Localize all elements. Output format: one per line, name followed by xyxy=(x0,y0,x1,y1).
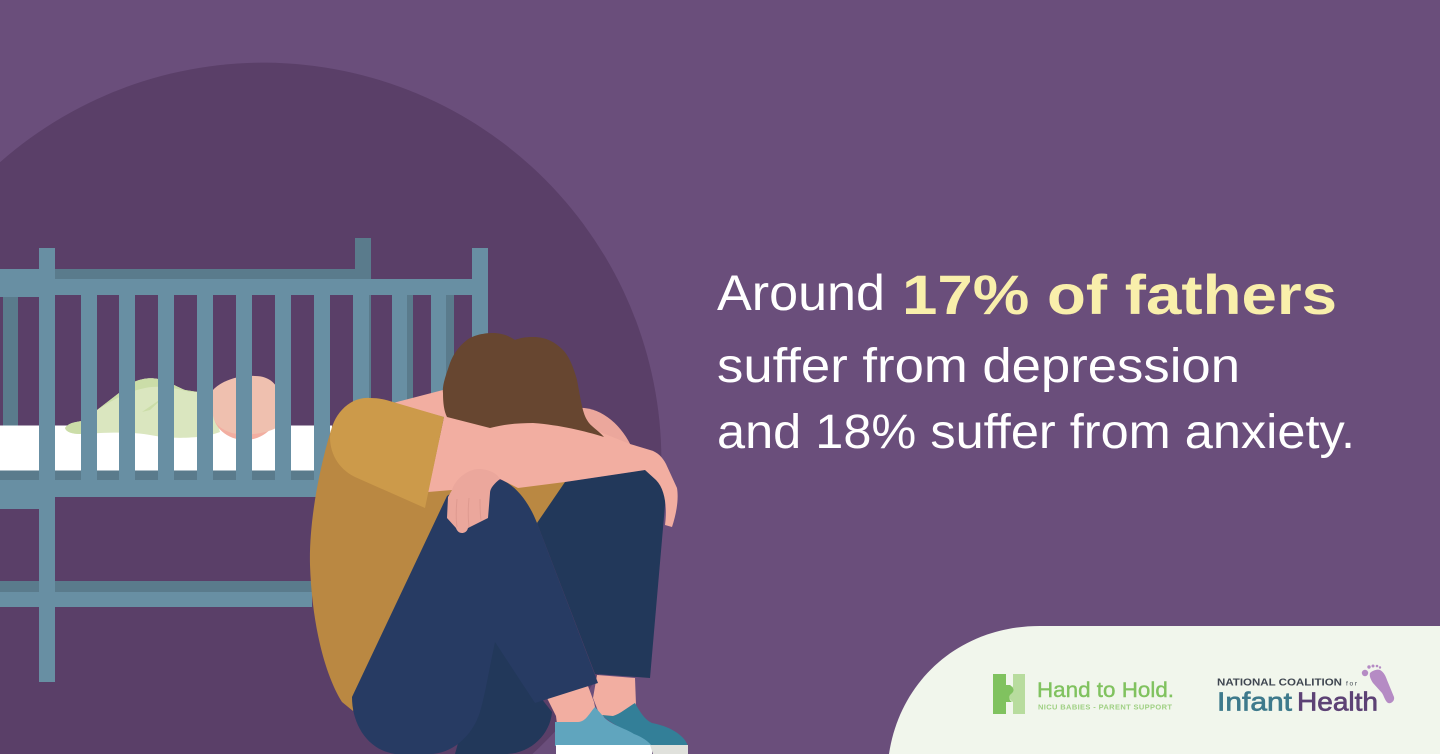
background circle xyxy=(0,63,661,754)
finger lines xyxy=(456,498,481,527)
for: for xyxy=(1346,680,1358,688)
illustration: seated father xyxy=(310,333,688,754)
logo: National Coalition for Infant Health xyxy=(1217,664,1394,716)
line 3: and 18% suffer from anxiety. xyxy=(717,406,1355,459)
baby blanket xyxy=(65,378,220,438)
hair xyxy=(443,333,604,437)
icon: footprint xyxy=(1362,664,1394,703)
baby head xyxy=(213,376,276,434)
hip shadow xyxy=(455,640,552,754)
logo: Hand to Hold xyxy=(993,674,1174,714)
line 1 highlight: 17% of fathers: 17% of fathers xyxy=(902,263,1337,326)
mattress xyxy=(0,426,332,470)
illustration: crib with baby xyxy=(0,238,488,682)
front shoe xyxy=(555,707,652,746)
back shoe xyxy=(602,703,688,746)
Infant: Infant xyxy=(1217,686,1293,716)
tagline: NICU BABIES - PARENT SUPPORT xyxy=(1038,702,1172,712)
arm xyxy=(393,390,678,527)
far arm xyxy=(575,408,632,448)
small heading: NATIONAL COALITION xyxy=(1217,678,1342,688)
crib front rails and posts xyxy=(0,248,488,682)
shoe sole xyxy=(556,745,652,754)
Health: Health xyxy=(1297,686,1378,716)
wordmark: Hand to Hold. xyxy=(1037,678,1174,702)
hand xyxy=(447,469,500,533)
line 1: Around: Around xyxy=(717,265,885,321)
torso front xyxy=(425,478,568,525)
baby blanket shade xyxy=(65,378,198,434)
icon: H mark xyxy=(993,674,1025,714)
back ankle xyxy=(593,675,636,718)
shoe sole shaded xyxy=(650,745,688,754)
line 2: suffer from depression xyxy=(717,340,1240,393)
front ankle xyxy=(547,686,596,724)
torso xyxy=(310,430,450,711)
baby head shade xyxy=(213,384,277,440)
crib back rail and back slats xyxy=(0,238,454,593)
sleeve xyxy=(330,398,444,508)
front leg xyxy=(352,480,598,754)
headline text xyxy=(717,263,1355,459)
back leg xyxy=(537,470,665,678)
logo panel xyxy=(889,626,1440,754)
